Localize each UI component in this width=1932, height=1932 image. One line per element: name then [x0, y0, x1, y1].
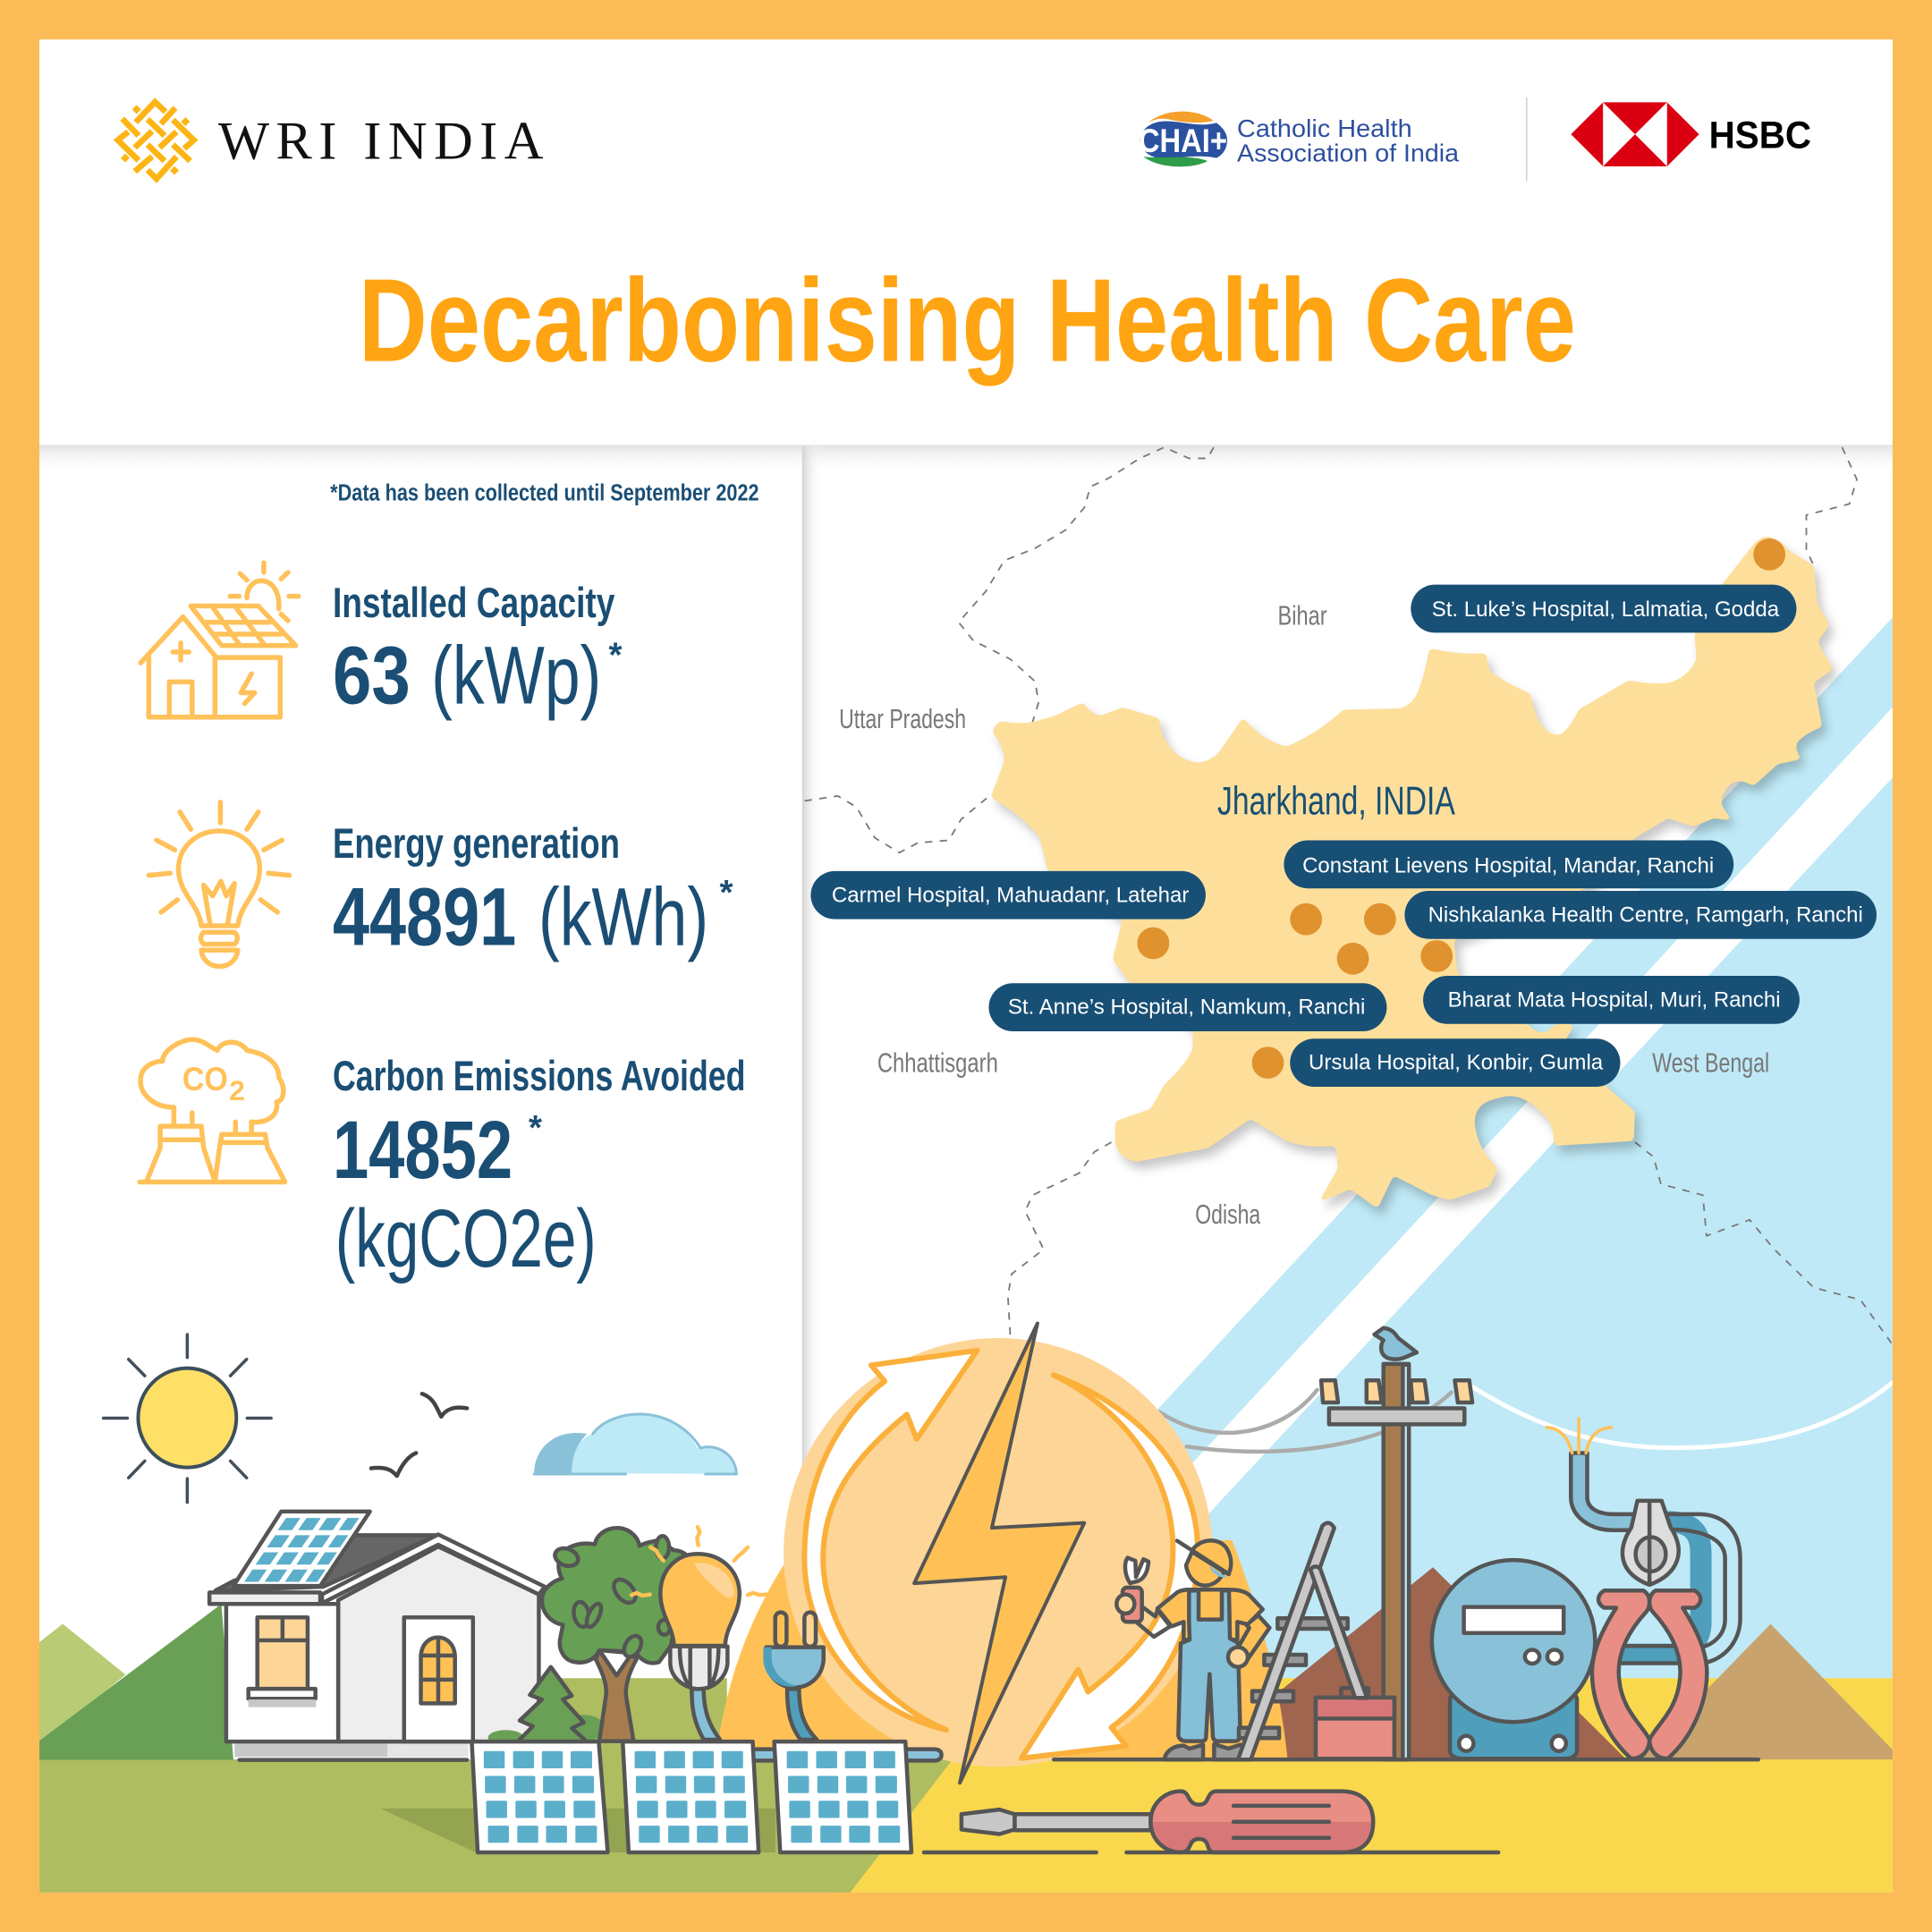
plug [763, 1613, 824, 1740]
stat: carbon emissions avoided: * [529, 1109, 542, 1148]
bushes [488, 1715, 605, 1745]
stat: energy generation [333, 820, 733, 963]
logo: CHAI: Association of India [1237, 139, 1460, 166]
logo: CHAI [1139, 112, 1460, 166]
callout: Constant Lievens: Constant Lievens Hospital, Mandar, Ranchi [1302, 853, 1714, 877]
sky: diagonal blue bands [908, 617, 1893, 1678]
callout: Ursula [1290, 1038, 1620, 1087]
house [209, 1534, 545, 1760]
stat: installed capacity: Installed Capacity [333, 580, 614, 626]
logo: HSBC: HSBC [1709, 114, 1811, 157]
arrow: upper left [804, 1351, 977, 1730]
icon: CO2 cooling towers: CO [182, 1060, 228, 1097]
arrow: lower right [1021, 1375, 1198, 1758]
knot mark [118, 102, 194, 179]
callout: Bharat Mata: Bharat Mata Hospital, Muri, Ranchi [1448, 987, 1781, 1012]
stat: installed capacity: 63 [333, 629, 411, 722]
panel divider shadow [802, 446, 822, 1765]
mountains: right [1195, 1567, 1893, 1759]
left illustration scene [104, 1335, 941, 1852]
callout: Bharat Mata [1423, 976, 1800, 1024]
toolbox [1316, 1688, 1394, 1758]
step ladder [1238, 1523, 1367, 1759]
worker and ladder [1116, 1523, 1367, 1759]
callout: St. Anne's [988, 983, 1386, 1031]
stat: carbon emissions avoided [333, 1053, 745, 1284]
callout: St. Anne's: St. Anne’s Hospital, Namkum, Ranchi [1008, 996, 1365, 1020]
worker [1116, 1540, 1269, 1759]
state labels: West Bengal [1652, 1048, 1769, 1078]
callout: Carmel: Carmel Hospital, Mahuadanr, Latehar [832, 883, 1189, 907]
pliers [1592, 1501, 1707, 1758]
logo: CHAI: CHAI+ [1139, 122, 1227, 159]
rooftop solar panel [233, 1512, 370, 1586]
stat: carbon emissions avoided: 14852 [333, 1103, 513, 1196]
map title: Jharkhand, INDIA [1217, 780, 1455, 824]
mountains: left [39, 1604, 233, 1760]
power lines [1159, 1383, 1893, 1452]
stat: carbon emissions avoided: (kgCO2e) [335, 1191, 597, 1284]
wordmark: WRI INDIA [218, 112, 544, 172]
sun [104, 1335, 271, 1503]
bird on pole [1375, 1328, 1417, 1360]
data note: *Data has been collected until September 2022 [330, 479, 759, 505]
map: Jharkhand state [991, 537, 1834, 1208]
cloud [534, 1414, 736, 1474]
logo: CHAI: Catholic Health [1237, 114, 1412, 142]
stat: energy generation: Energy generation [333, 820, 620, 867]
callout: Nishkalanka: Nishkalanka Health Centre, Ramgarh, Ranchi [1428, 902, 1863, 927]
stat: installed capacity [333, 580, 623, 722]
header shadow [39, 445, 1893, 474]
stat: installed capacity: (kWp) [431, 629, 601, 722]
pine tree [518, 1667, 587, 1741]
title: Decarbonising Health Care [359, 255, 1576, 387]
cable [1546, 1419, 1741, 1663]
panel shadow on grass [380, 1809, 775, 1852]
stat: carbon emissions avoided: Carbon Emissions Avoided [333, 1053, 745, 1099]
tool ground lines [924, 1851, 1498, 1854]
logo: WRI India [118, 102, 544, 179]
utility pole [1321, 1364, 1472, 1759]
right illustration scene [924, 1328, 1758, 1852]
callout: St. Luke's: St. Luke’s Hospital, Lalmatia, Godda [1432, 597, 1780, 622]
lightning bolt [914, 1323, 1084, 1783]
tree, bulb and plug [542, 1527, 824, 1741]
ground: green [39, 1678, 953, 1893]
logo: HSBC [1571, 102, 1811, 166]
ground line [1054, 1758, 1758, 1761]
callout: Constant Lievens [1284, 840, 1733, 888]
callout: St. Luke's [1411, 585, 1796, 632]
state labels: Bihar [1278, 601, 1327, 631]
state labels: Odisha [1195, 1200, 1260, 1230]
hospital location dots [1137, 538, 1785, 1079]
header panel [39, 39, 1893, 445]
state labels: Chhattisgarh [877, 1048, 998, 1078]
logo divider [1526, 97, 1527, 181]
map borders (dashed) [805, 447, 1892, 1343]
icon: solar house [140, 563, 299, 717]
birds [371, 1394, 467, 1476]
electric meter [1432, 1560, 1595, 1758]
energy circle [784, 1323, 1213, 1783]
connector cable [749, 1750, 941, 1760]
ground solar panels [471, 1741, 911, 1852]
tree [542, 1528, 689, 1741]
stat: energy generation: * [719, 874, 733, 912]
callout: Nishkalanka [1404, 891, 1877, 939]
ground: yellow [838, 1678, 1893, 1893]
stat: energy generation: (kWh) [538, 870, 708, 963]
icon: light bulb [148, 802, 289, 966]
icon: CO2 cooling towers: 2 [229, 1074, 245, 1106]
icon: CO2 cooling towers [140, 1039, 284, 1182]
state labels: Uttar Pradesh [839, 705, 966, 734]
screwdriver [962, 1792, 1373, 1852]
light bulb [631, 1527, 767, 1740]
stat: installed capacity: * [609, 636, 623, 674]
orange hill behind energy circle [716, 1540, 1288, 1759]
stat: energy generation: 44891 [333, 870, 516, 963]
state labels [839, 601, 1769, 1230]
callout: Carmel [810, 871, 1206, 919]
callout: Ursula: Ursula Hospital, Konbir, Gumla [1309, 1051, 1604, 1075]
